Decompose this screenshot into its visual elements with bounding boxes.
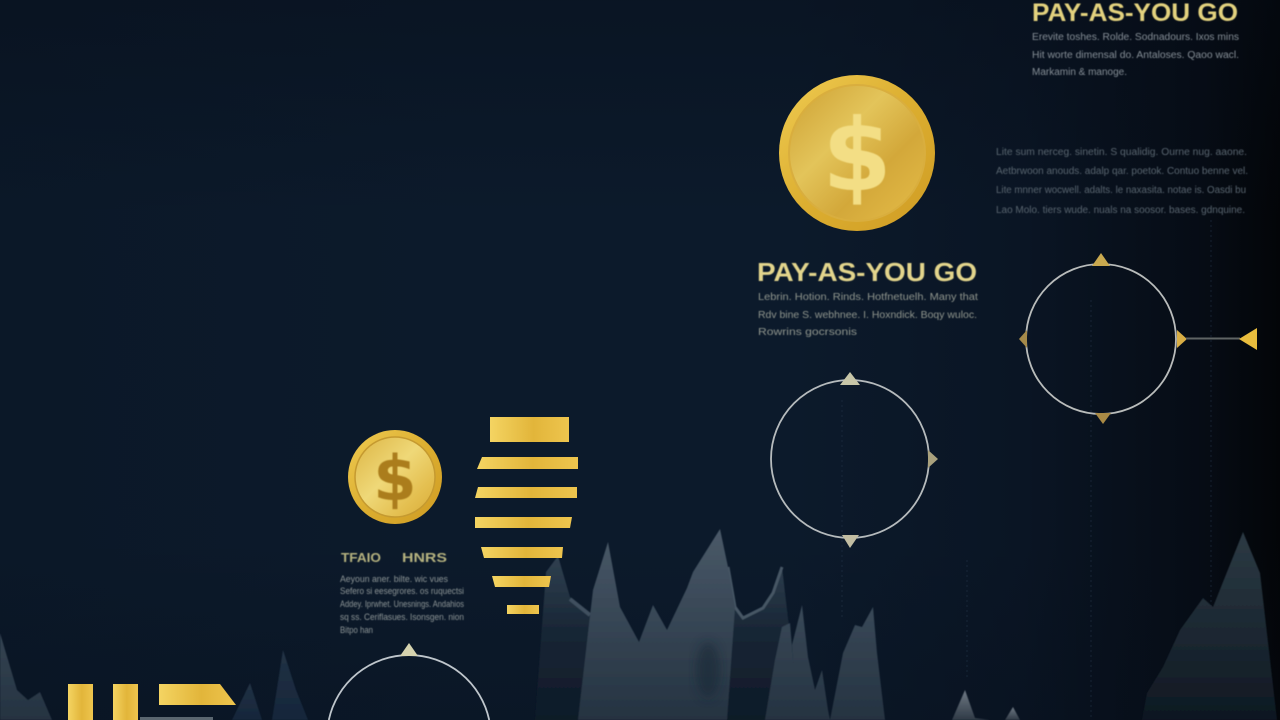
text block: top right description [1032, 32, 1239, 78]
arrow: gold pointer [1239, 328, 1257, 350]
connector line [1186, 338, 1240, 340]
heading: small coin label [341, 550, 447, 565]
heading: small coin label: HNRS [402, 550, 447, 565]
mountain shadow patch [696, 642, 720, 698]
front mass [578, 529, 735, 720]
marker: top [1092, 253, 1110, 266]
text block: right description: Lao Molo. tiers wude. nuals na soosor. bases. gdnquine. [996, 205, 1245, 216]
text block: small coin description [340, 574, 464, 635]
bottom left gold block shapes [68, 684, 236, 720]
mountain chart: centre range [535, 529, 885, 720]
circle: top right ring with markers [1019, 253, 1257, 424]
heading: centre: PAY-AS-YOU GO [757, 257, 977, 287]
marker: top [400, 643, 418, 656]
mountain chart: right [952, 532, 1277, 720]
text block: small coin description: Sefero si eesegrores. os ruquectsi [340, 586, 464, 596]
mountain chart: bottom left [0, 633, 308, 720]
marker: bottom [842, 535, 859, 548]
text block: right description: Aetbrwoon anouds. adalp qar. poetok. Contuo benne vel. [996, 166, 1248, 177]
text block: right description: Lite sum nerceg. sinetin. S qualidig. Ourne nug. aaone. [996, 147, 1247, 158]
marker: right [928, 450, 938, 468]
back valley [725, 567, 800, 720]
text block: centre description: Rowrins gocrsonis [758, 327, 857, 338]
circle: bottom ring with marker [329, 643, 489, 720]
marker: left [1019, 330, 1027, 348]
text block: top right description: Markamin & manoge. [1032, 67, 1127, 78]
text block: small coin description: Addey. Iprwhet. Unesnings. Andahios [340, 599, 464, 609]
marker: top [840, 372, 860, 385]
text block: centre description: Lebrin. Hotion. Rinds. Hotfnetuelh. Many that [758, 292, 978, 303]
text block: top right description: Hit worte dimensal do. Antaloses. Qaoo wacl. [1032, 50, 1239, 61]
icon: large gold coin: $ [822, 97, 892, 214]
text block: centre description: Rdv bine S. webhnee. I. Hoxndick. Boqy wuloc. [758, 310, 977, 321]
icon: small gold coin: $ [373, 442, 417, 515]
icon: small gold coin [348, 430, 442, 524]
front spike [765, 623, 798, 720]
circle: centre ring with markers [771, 372, 938, 548]
marker: right [1177, 330, 1187, 348]
narrow spikes [792, 605, 830, 720]
back ridge band [570, 599, 590, 615]
text block: small coin description: Bitpo han [340, 625, 373, 635]
back ridge left of range [535, 556, 596, 720]
marker: bottom [1095, 413, 1111, 424]
right peak [830, 607, 885, 720]
bar chart: gold funnel bars [475, 417, 578, 614]
text block: centre description [758, 292, 978, 338]
valley ridge band [728, 567, 782, 618]
text block: small coin description: Aeyoun aner. bilte. wic vues [340, 574, 448, 584]
text block: top right description: Erevite toshes. Rolde. Sodnadours. Ixos mins [1032, 32, 1239, 43]
heading: small coin label: TFAIO [341, 550, 381, 565]
icon: large gold coin [779, 75, 935, 231]
text block: right description [996, 147, 1248, 216]
text block: small coin description: sq ss. Ceriflasues. Isonsgen. nion [340, 612, 464, 622]
text block: right description: Lite mnner wocwell. adalts. le naxasita. notae is. Oasdi bu [996, 185, 1246, 196]
